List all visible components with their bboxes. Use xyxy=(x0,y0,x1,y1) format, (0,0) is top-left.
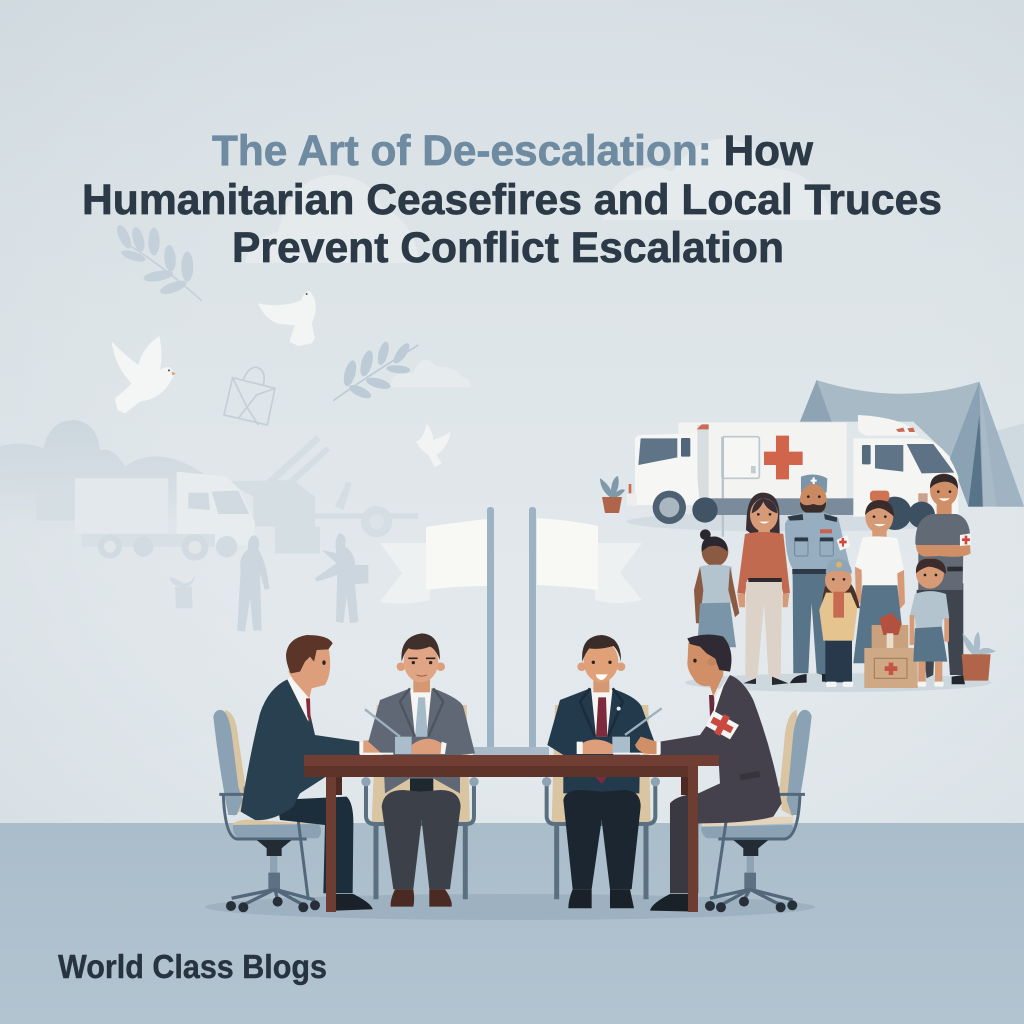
tent xyxy=(800,380,1024,507)
delegate left profile xyxy=(241,635,386,911)
aid truck xyxy=(627,415,958,537)
cannon xyxy=(227,435,418,553)
title xyxy=(82,127,942,272)
left chair xyxy=(213,710,321,912)
ghost person left xyxy=(237,535,269,632)
microphone and glass right xyxy=(612,708,662,755)
child in blue shirt xyxy=(910,558,949,687)
supply bag outline xyxy=(224,367,275,425)
footer brand: World Class Blogs xyxy=(58,948,327,985)
olive branch right xyxy=(333,341,418,401)
left pole xyxy=(487,507,494,750)
ghost truck xyxy=(75,472,255,561)
ground shadow truck xyxy=(627,512,960,532)
aid camp scene xyxy=(627,380,1024,692)
floor shadow xyxy=(205,894,815,920)
child with cap and vest xyxy=(819,559,860,687)
pole base xyxy=(473,747,549,755)
delegate right profile with armband xyxy=(635,635,782,912)
delegate centre right xyxy=(547,635,655,908)
woman in orange top xyxy=(737,493,790,685)
right banner tail xyxy=(595,543,642,603)
title line 3: Prevent Conflict Escalation xyxy=(232,224,784,272)
hills silhouette xyxy=(0,420,213,543)
dove top xyxy=(258,291,316,346)
floor xyxy=(0,823,1024,1024)
right chair xyxy=(701,710,812,912)
title line 1: The Art of De-escalation: How xyxy=(212,127,814,175)
microphone and glass xyxy=(363,709,412,755)
aid boxes xyxy=(864,613,918,688)
ghost plant xyxy=(170,573,195,608)
small potted plant beside truck xyxy=(600,476,625,513)
ghost crate xyxy=(37,490,77,521)
white flags on poles xyxy=(380,507,642,755)
distant hill xyxy=(987,423,1024,507)
woman in white shirt xyxy=(853,500,906,663)
man in grey shirt with armband xyxy=(915,473,971,684)
cloud right xyxy=(390,360,471,387)
centre right chair xyxy=(542,705,660,899)
left flag xyxy=(426,519,487,590)
meeting table xyxy=(304,755,719,912)
left banner tail xyxy=(380,543,430,604)
right flag xyxy=(537,518,598,590)
uniformed officer xyxy=(785,475,852,683)
potted plant right xyxy=(962,632,996,681)
girl with bun xyxy=(694,529,739,647)
dove left xyxy=(112,336,176,413)
title line 2: Humanitarian Ceasefires and Local Truces xyxy=(82,176,942,224)
left half of negotiation xyxy=(213,633,479,912)
olive branch top xyxy=(114,223,202,301)
right half of negotiation xyxy=(542,635,812,912)
delegate centre left xyxy=(368,633,475,907)
ghost person right xyxy=(315,533,368,623)
centre left chair xyxy=(361,705,479,899)
faded background scene xyxy=(0,223,471,632)
ground shadow family xyxy=(685,673,992,692)
right pole xyxy=(529,507,536,750)
clouds behind title xyxy=(245,139,835,263)
dove small xyxy=(416,423,451,467)
